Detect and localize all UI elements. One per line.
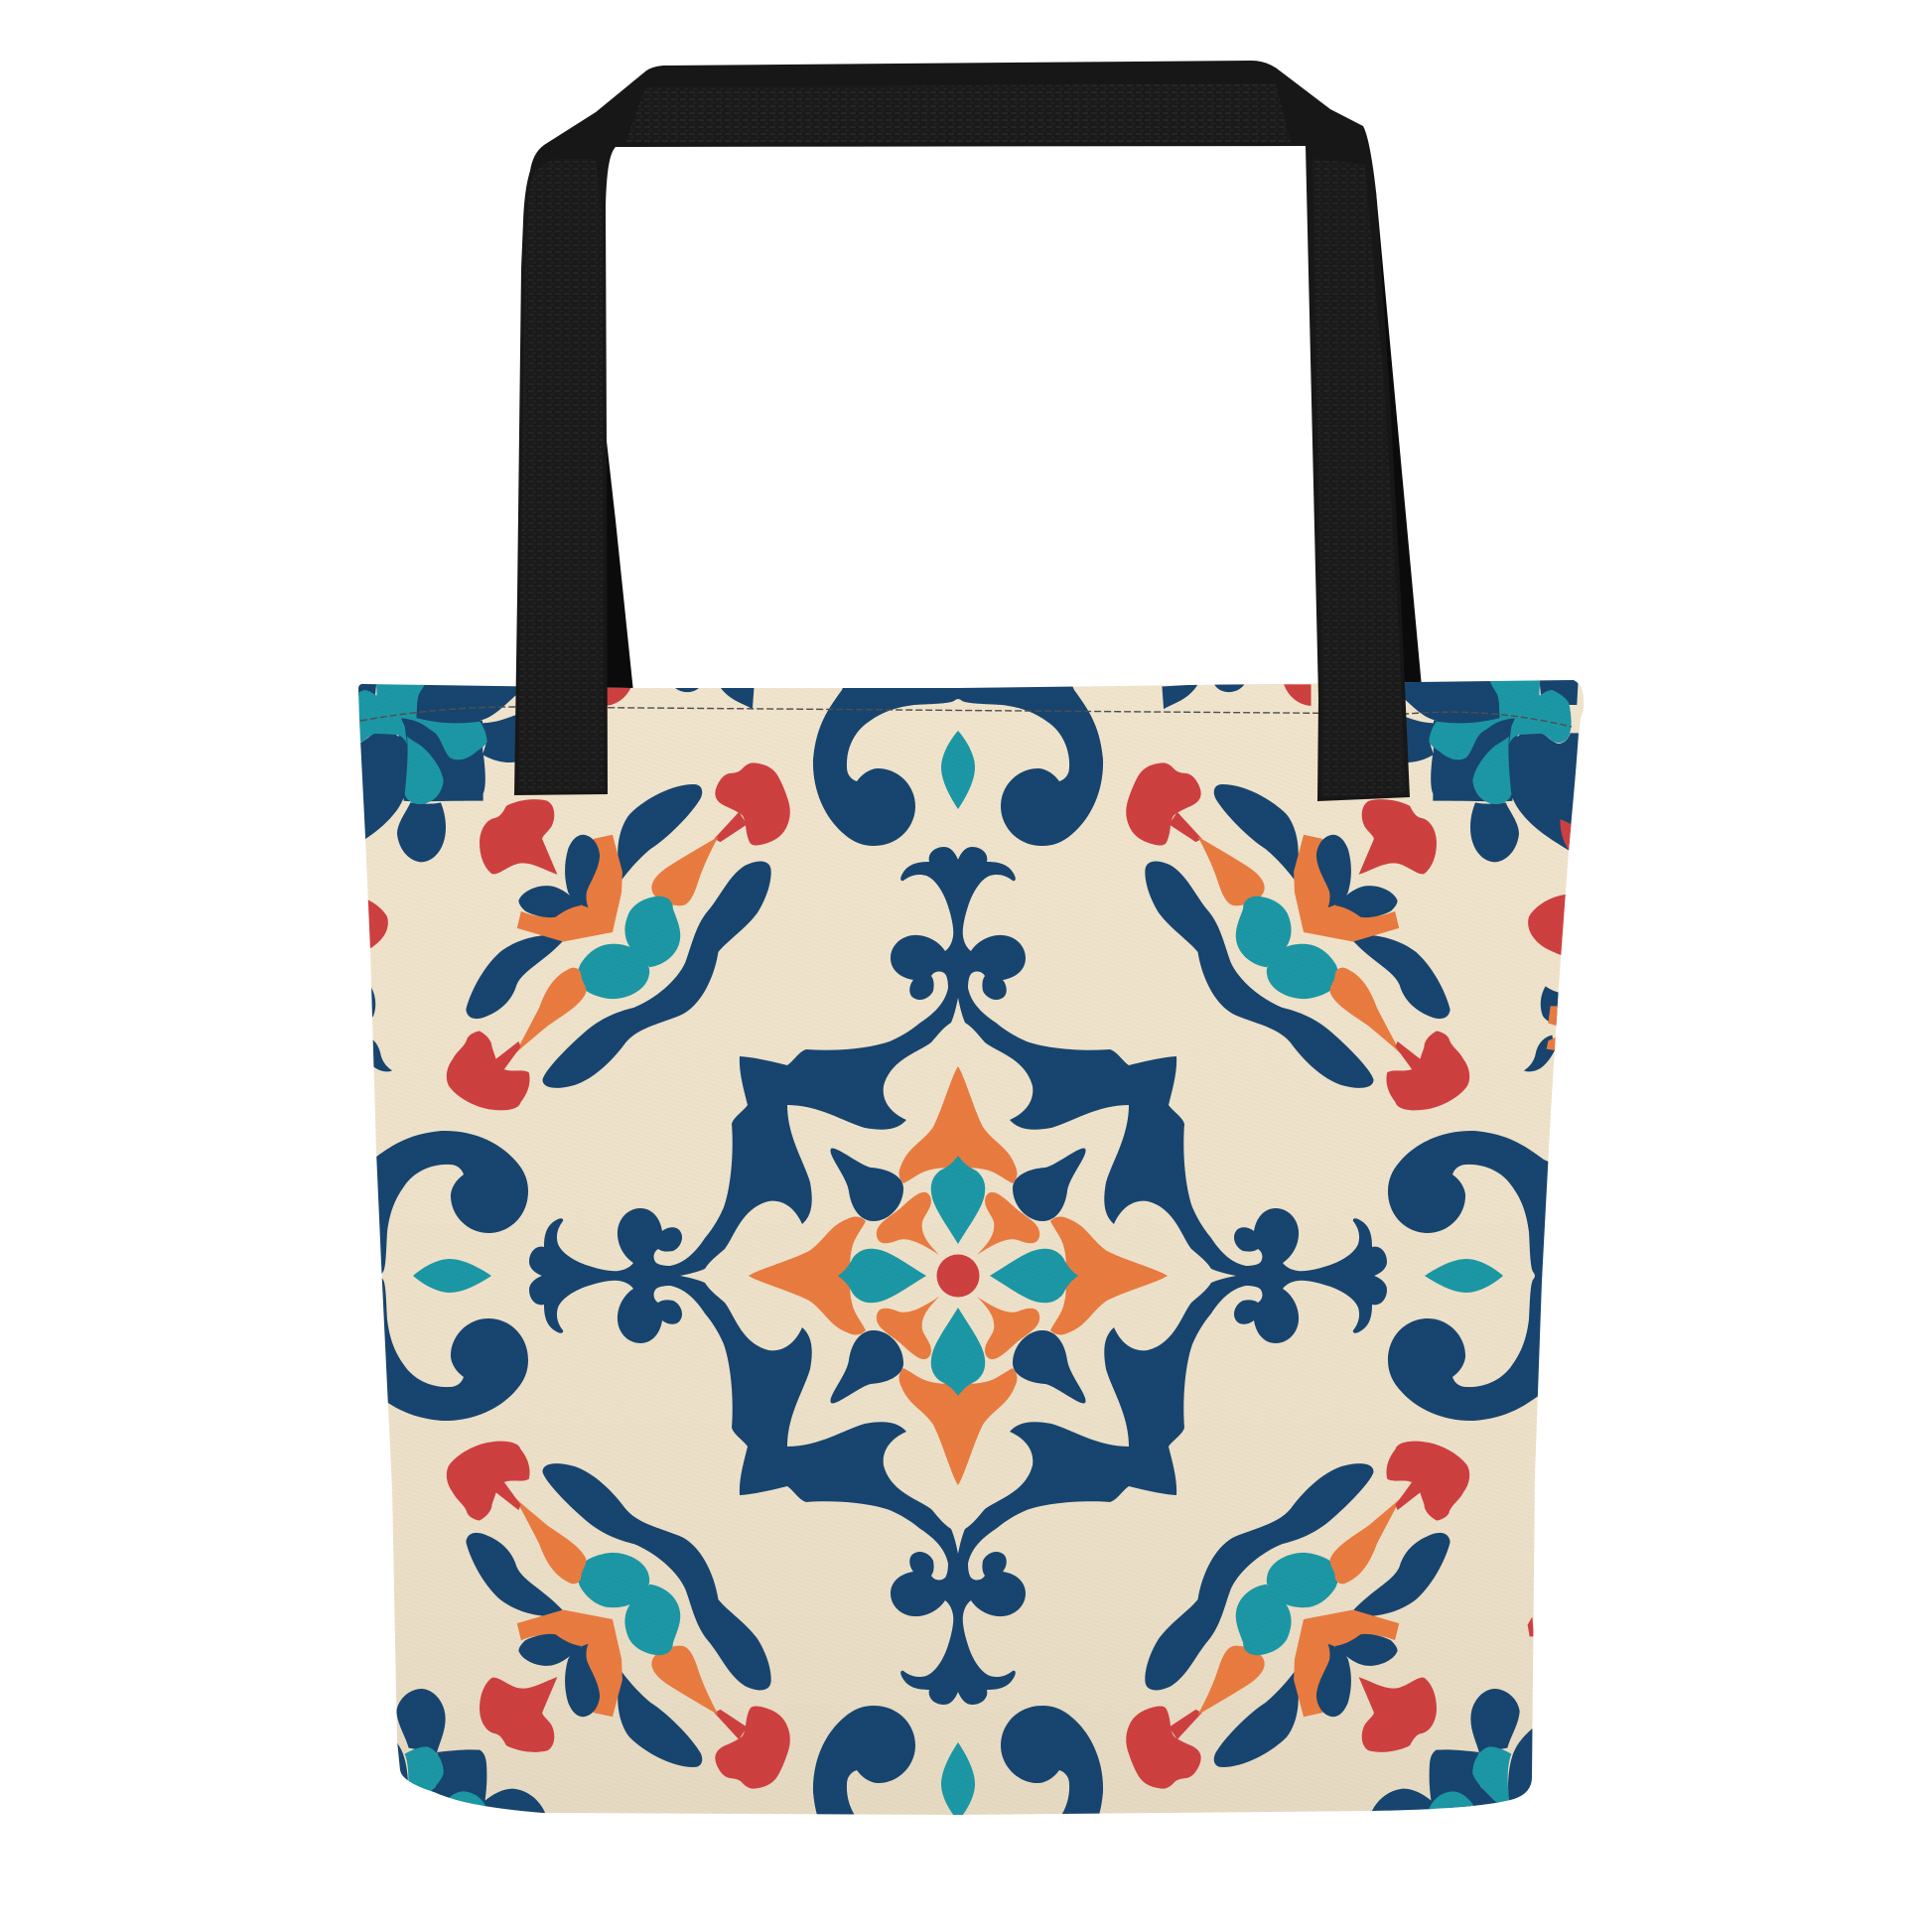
- corner flower: top right: [1400, 673, 1579, 1071]
- front handle strap: [514, 61, 1410, 801]
- finial: left: [529, 1208, 682, 1343]
- red centre: [937, 1255, 979, 1297]
- woven band: right strap: [1312, 159, 1406, 797]
- central medallion and edge scrolls: [323, 640, 1593, 1911]
- corner flower: bottom left: [396, 1689, 545, 1813]
- edge scroll: bottom: [812, 1706, 1104, 1815]
- back straps of handles: [556, 192, 1422, 695]
- ornament: top left diagonal spray: [447, 684, 790, 1110]
- corner flower: top left: [358, 683, 516, 1072]
- cream fabric: [338, 665, 1608, 1837]
- teal petals: [838, 1156, 1078, 1396]
- fabric twill texture: [338, 665, 1608, 1837]
- finial: right: [1234, 1208, 1387, 1343]
- ornament: bottom left diagonal spray: [447, 1442, 790, 1789]
- small orange leaves: [877, 1192, 1039, 1359]
- medallion frame: [670, 988, 1246, 1564]
- woven band: top: [625, 83, 1291, 142]
- tote bag body: [358, 680, 1585, 1815]
- ornament: bottom right diagonal spray: [1126, 1442, 1469, 1789]
- edge scroll: left: [376, 1131, 528, 1421]
- finial: top: [891, 847, 1026, 1000]
- edge scroll: top: [812, 687, 1104, 846]
- large orange petals: [749, 1066, 1168, 1485]
- woven band: left strap: [518, 159, 604, 792]
- corner flower: bottom right: [1370, 1616, 1536, 1815]
- navy tulips: [830, 1148, 1086, 1404]
- top hem stitching: [360, 707, 1572, 727]
- finial: bottom: [891, 1552, 1026, 1705]
- ornament: top right diagonal spray: [1126, 684, 1469, 1110]
- edge scroll: right: [1388, 1131, 1549, 1421]
- tile corner ornaments and edge scraps: [338, 673, 1579, 1867]
